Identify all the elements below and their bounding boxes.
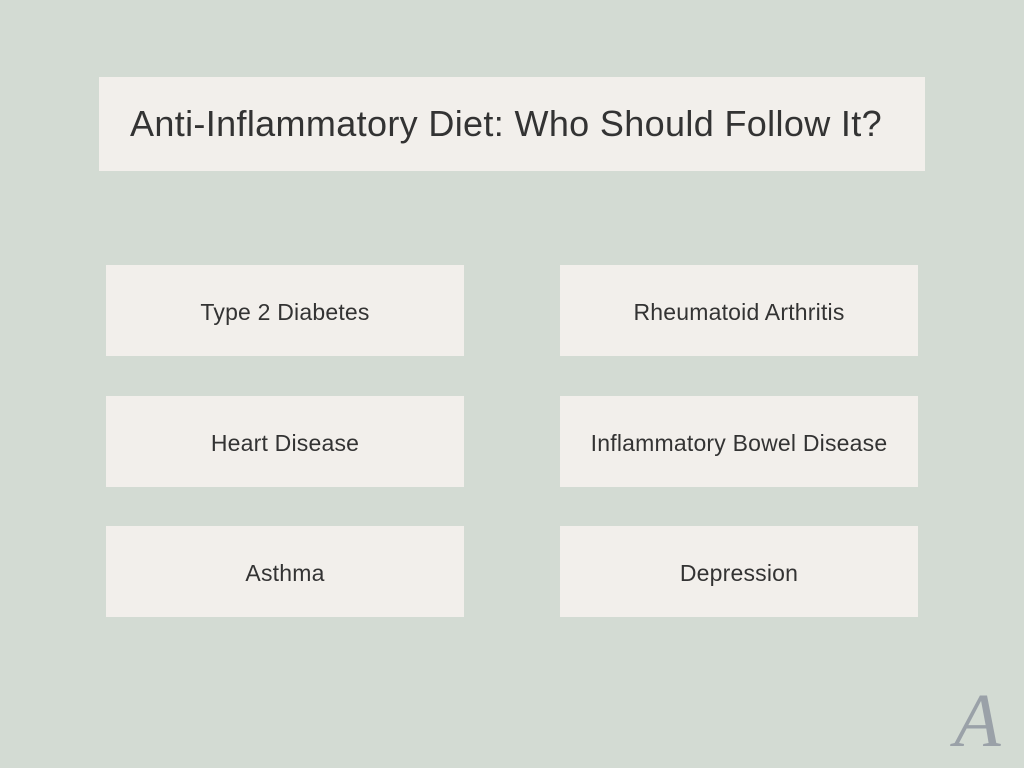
card: Inflammatory Bowel Disease: Inflammatory Bowel Disease (591, 430, 887, 456)
card: Heart Disease (106, 396, 464, 487)
logo: script A: A (954, 679, 1001, 763)
card: Depression (560, 526, 918, 617)
title (99, 77, 925, 171)
card: Rheumatoid Arthritis: Rheumatoid Arthritis (633, 298, 845, 324)
card: Inflammatory Bowel Disease (560, 396, 918, 487)
card: Type 2 Diabetes (106, 265, 464, 356)
card: Depression: Depression (680, 560, 798, 586)
card: Rheumatoid Arthritis (560, 265, 918, 356)
card: Asthma: Asthma (245, 560, 325, 586)
card: Asthma (106, 526, 464, 617)
title: Anti-Inflammatory Diet: Who Should Follow It? (130, 103, 882, 144)
card: Heart Disease: Heart Disease (211, 430, 359, 456)
card: Type 2 Diabetes: Type 2 Diabetes (200, 298, 370, 324)
